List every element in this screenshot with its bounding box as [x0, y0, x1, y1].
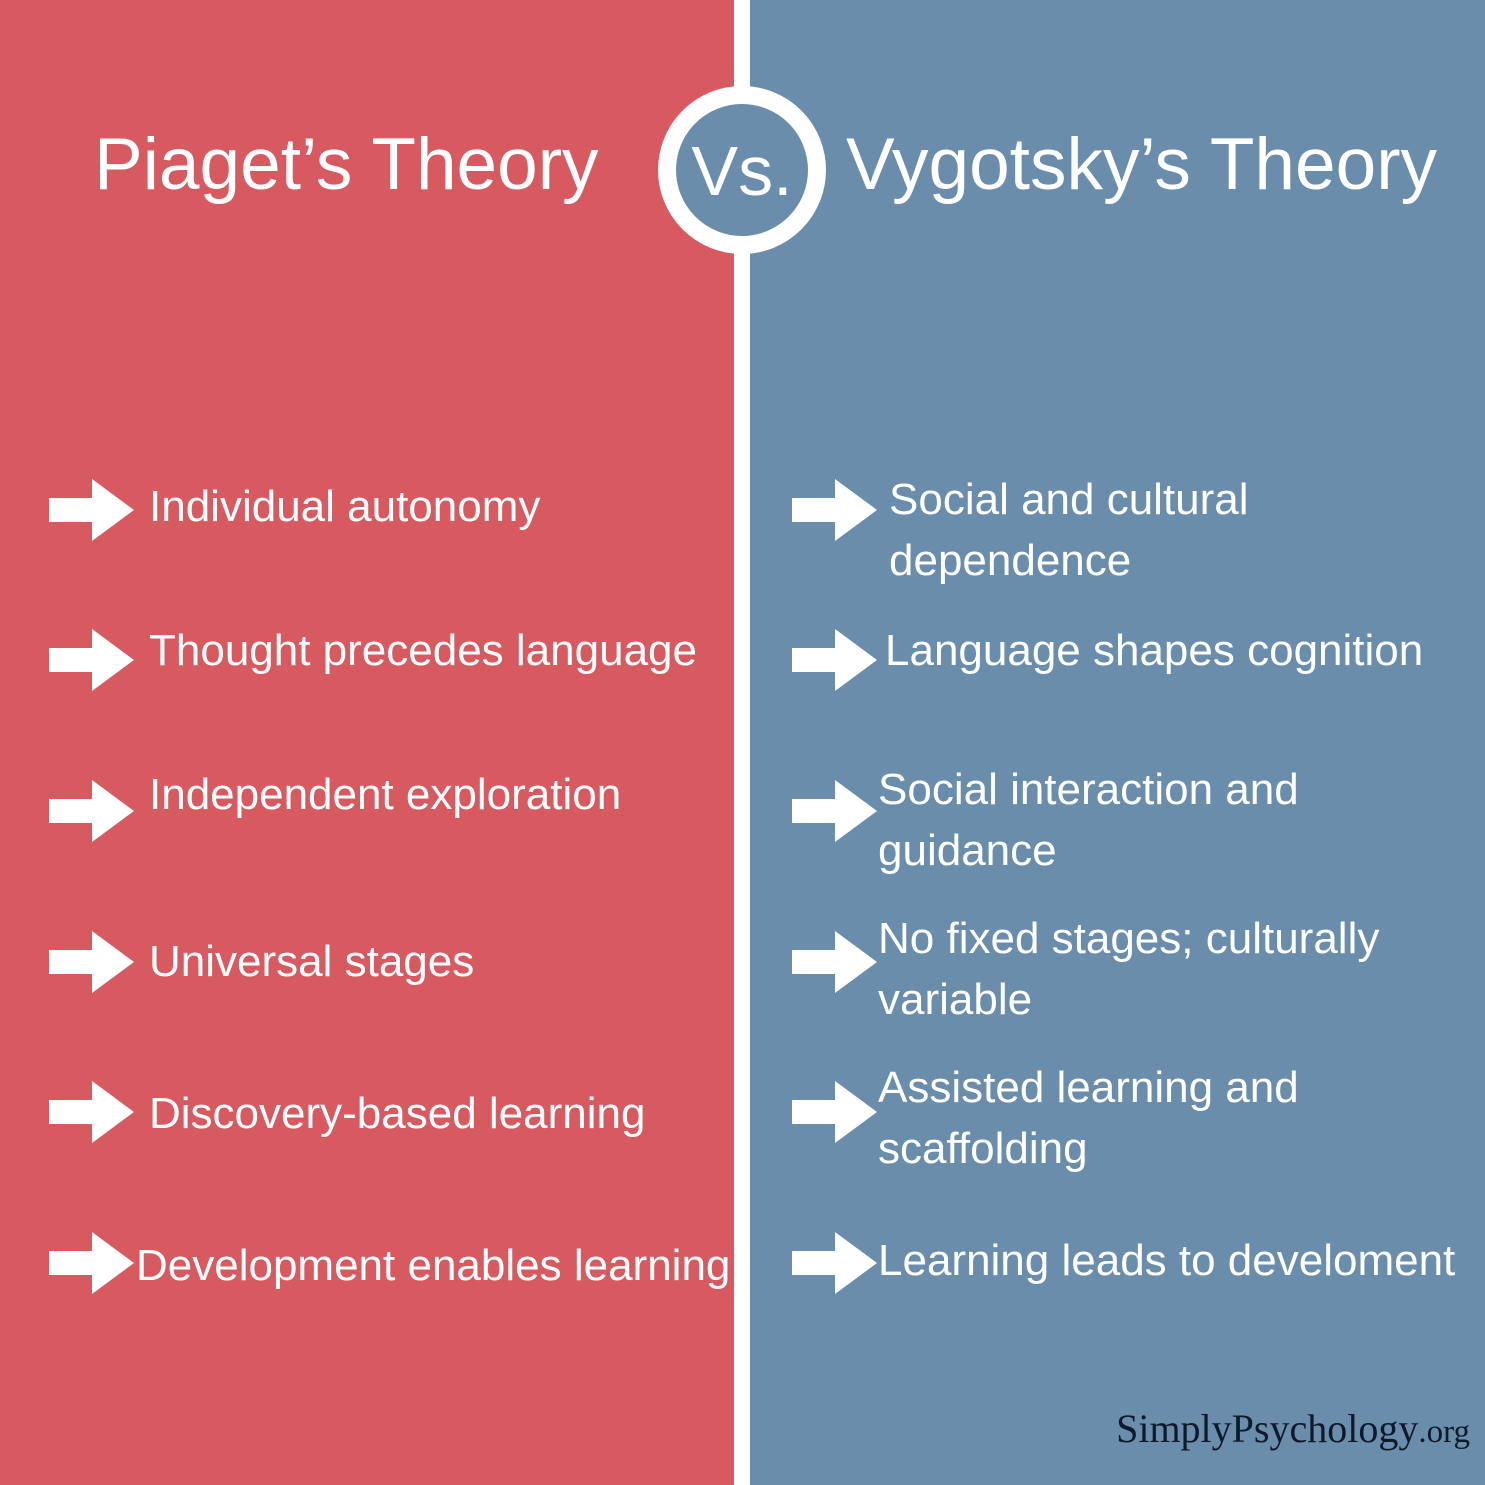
item: Language shapes cognition: [792, 626, 1423, 691]
item: Social interaction and guidance: guidance: [878, 826, 1057, 875]
vs badge: Vs.: [691, 132, 793, 210]
item: Discovery-based learning: Discovery-based learning: [149, 1089, 645, 1138]
item: Social and cultural dependence: [792, 475, 1249, 585]
item: Development enables learning: Development enables learning: [136, 1241, 730, 1290]
divider: [734, 0, 750, 1485]
vs badge: [667, 95, 817, 245]
item: No fixed stages: No fixed stages; culturally: [878, 914, 1379, 963]
item: Social interaction and guidance: Social interaction and: [878, 765, 1299, 814]
item: Development enables learning: [49, 1232, 730, 1294]
item: Individual autonomy: Individual autonomy: [149, 482, 540, 531]
title: Piaget's Theory: Piaget’s Theory: [94, 124, 599, 205]
item: Discovery-based learning: [49, 1081, 645, 1143]
item: Independent exploration: [49, 770, 621, 842]
item: Assisted learning: [792, 1063, 1299, 1173]
item: Social and cultural dependence: Social and cultural: [889, 475, 1249, 524]
item: Thought precedes language: Thought precedes language: [149, 626, 697, 675]
item: Assisted learning: scaffolding: [878, 1124, 1088, 1173]
item: Thought precedes language: [49, 626, 697, 691]
panel: Vygotsky: [750, 0, 1485, 1485]
panel: Piaget: [0, 0, 734, 1485]
item: No fixed stages: variable: [878, 975, 1032, 1024]
item: Individual autonomy: [49, 479, 540, 541]
item: Universal stages: [49, 931, 474, 993]
item: Language shapes cognition: Language shapes cognition: [885, 626, 1423, 675]
item: Social interaction and guidance: [792, 765, 1299, 875]
item: Independent exploration: Independent exploration: [149, 770, 621, 819]
footer: source: SimplyPsychology.org: [1116, 1406, 1470, 1451]
list: Vygotsky items: [792, 475, 1455, 1294]
item: Universal stages: Universal stages: [149, 937, 474, 986]
list: Piaget items: [49, 479, 730, 1294]
item: Assisted learning: Assisted learning and: [878, 1063, 1299, 1112]
title: Vygotsky's Theory: Vygotsky’s Theory: [846, 124, 1438, 205]
item: No fixed stages: [792, 914, 1379, 1024]
item: Social and cultural dependence: dependence: [889, 536, 1131, 585]
item: Learning leads to development: Learning leads to develoment: [878, 1236, 1455, 1285]
item: Learning leads to development: [792, 1232, 1455, 1294]
